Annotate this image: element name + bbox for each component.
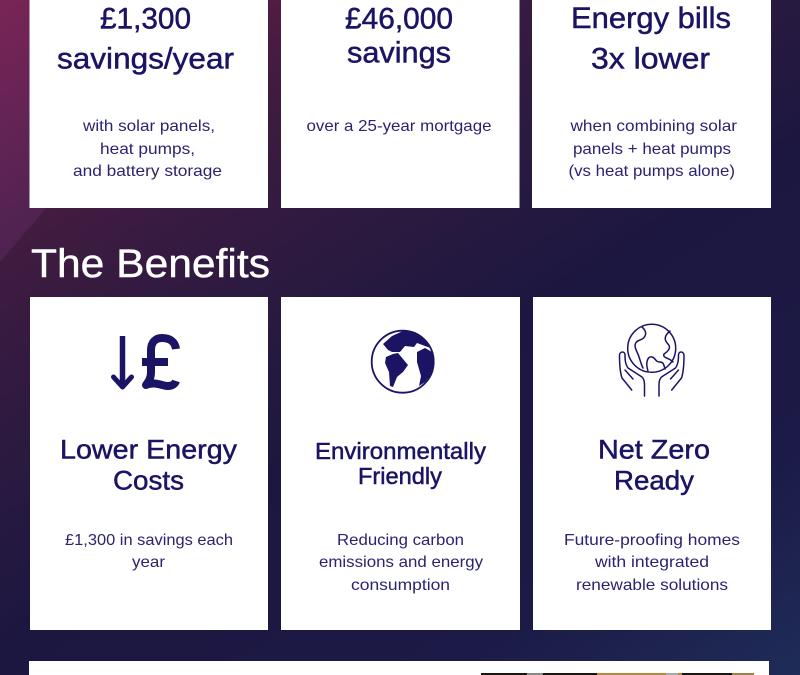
heading: The Benefits: The Benefits [31, 242, 270, 286]
stat heading: savings per year: savings/year [57, 42, 234, 76]
description: lower energy costs: £1,300 in savings each [65, 532, 233, 549]
description: energy bills: (vs heat pumps alone) [568, 163, 735, 180]
panel: net zero ready [533, 297, 771, 630]
description: energy bills: when combining solar [569, 118, 738, 135]
description: savings per year [73, 118, 222, 180]
card title: lower energy costs: Lower Energy [60, 434, 238, 464]
card title: lower energy costs: Costs [113, 466, 184, 496]
stat heading: energy bills [571, 2, 731, 76]
description: energy bills [568, 118, 738, 180]
description: net zero ready [564, 532, 740, 594]
card title: net zero ready: Ready [614, 466, 695, 496]
card title: net zero ready [598, 434, 710, 496]
panel: mortgage savings [281, 0, 520, 208]
description: savings per year: heat pumps, [100, 141, 195, 158]
description: lower energy costs [65, 532, 233, 571]
panel: savings per year [30, 0, 268, 208]
panel: bottom section [29, 661, 769, 675]
card title: net zero ready: Net Zero [598, 434, 710, 464]
stat heading: energy bills: 3x lower [591, 42, 710, 76]
panel: environmentally friendly [281, 297, 520, 630]
description: environmentally friendly: consumption [351, 577, 450, 594]
description: environmentally friendly: emissions and energy [319, 554, 483, 571]
photo strip [481, 673, 754, 675]
description: energy bills: panels + heat pumps [573, 141, 731, 158]
card title: environmentally friendly: Friendly [358, 463, 443, 489]
panel: lower energy costs [30, 297, 268, 630]
description: net zero ready: renewable solutions [576, 577, 728, 594]
stat heading: mortgage savings: £46,000 [345, 2, 453, 36]
description: environmentally friendly: Reducing carbon [337, 532, 464, 549]
description: net zero ready: Future-proofing homes [564, 532, 740, 549]
description: savings per year: with solar panels, [82, 118, 215, 135]
stat heading: savings per year [57, 2, 234, 76]
description: savings per year: and battery storage [73, 163, 222, 180]
description: net zero ready: with integrated [594, 554, 709, 571]
stat heading: savings per year: £1,300 [100, 2, 191, 36]
icon: down arrow and pound [114, 336, 176, 387]
card title: lower energy costs [60, 434, 238, 496]
icon: globe [372, 331, 434, 393]
panel: energy bills [532, 0, 771, 208]
card title: environmentally friendly: Environmentally [315, 438, 487, 464]
stat heading: energy bills: Energy bills [571, 2, 731, 35]
icon: hands holding globe [620, 324, 684, 396]
description: environmentally friendly [319, 532, 483, 594]
stat heading: mortgage savings: savings [347, 36, 451, 70]
stat heading: mortgage savings [345, 2, 453, 70]
description: lower energy costs: year [132, 554, 166, 571]
card title: environmentally friendly [315, 438, 487, 489]
description: mortgage savings: over a 25-year mortgage [306, 118, 492, 135]
